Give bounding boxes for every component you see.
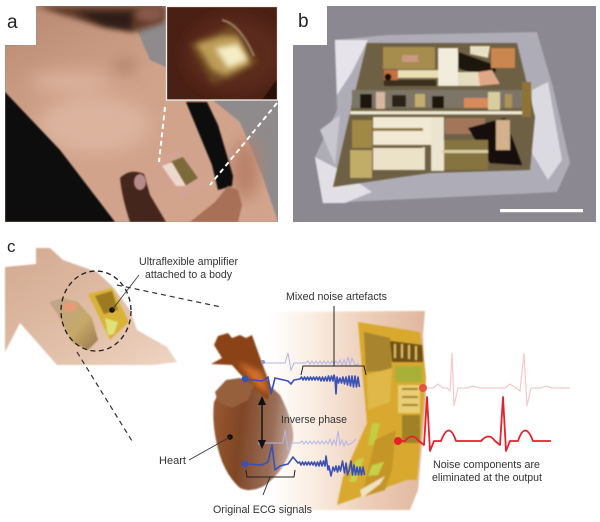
label a: a — [7, 12, 18, 33]
dashed circle — [61, 271, 131, 351]
bracket: original signals — [213, 470, 312, 516]
top blocks — [383, 47, 435, 69]
black top left — [5, 92, 115, 222]
heart — [211, 333, 293, 490]
circuit body — [333, 43, 535, 187]
label: inverse phase: Inverse phase — [281, 414, 347, 426]
bracket: mixed noise — [286, 291, 387, 375]
head shadow — [36, 6, 165, 32]
pale red ECG output — [419, 353, 570, 406]
label a box — [0, 0, 36, 45]
label: amplifier — [139, 256, 238, 281]
label: noise output: eliminated at the output — [432, 472, 542, 484]
blue signals — [242, 360, 364, 476]
torso illustration — [5, 248, 177, 365]
middle row — [352, 90, 522, 108]
skin of chest — [5, 6, 278, 222]
patch on skin — [158, 149, 208, 200]
label: amplifier: Ultraflexible amplifier — [139, 256, 238, 268]
body side with circuit — [270, 311, 426, 510]
heart ghost in torso — [49, 298, 98, 350]
label b box — [290, 0, 327, 45]
label: amplifier: attached to a body — [145, 269, 233, 281]
pale ghost blue signals — [260, 353, 359, 450]
dashed callout lines — [77, 285, 221, 441]
label b: b — [298, 11, 309, 32]
panel a: photo of amplifier on chest — [5, 6, 278, 222]
black strap right — [186, 102, 233, 190]
flexible circuit — [337, 322, 426, 505]
bottom blocks — [350, 111, 522, 114]
label: noise output: Noise components are — [433, 459, 540, 471]
transparent film — [315, 32, 570, 203]
bracket: mixed noise: Mixed noise artefacts — [286, 291, 387, 303]
label: heart — [159, 434, 233, 467]
bracket: original signals: Original ECG signals — [213, 504, 312, 516]
inverse phase arrow — [258, 396, 266, 449]
hand right — [190, 186, 242, 222]
label: heart: Heart — [159, 455, 186, 467]
label: noise output — [432, 459, 542, 484]
hand finger — [120, 172, 166, 222]
red ECG output — [394, 397, 551, 451]
label c: c — [7, 237, 16, 256]
leader dot — [109, 307, 115, 313]
panel b: photo of flexible circuit — [293, 6, 596, 222]
inset: magnified device — [166, 6, 285, 100]
scale bar — [500, 209, 583, 212]
small circuit on torso — [88, 288, 129, 340]
dashed zoom lines to inset — [159, 103, 277, 185]
